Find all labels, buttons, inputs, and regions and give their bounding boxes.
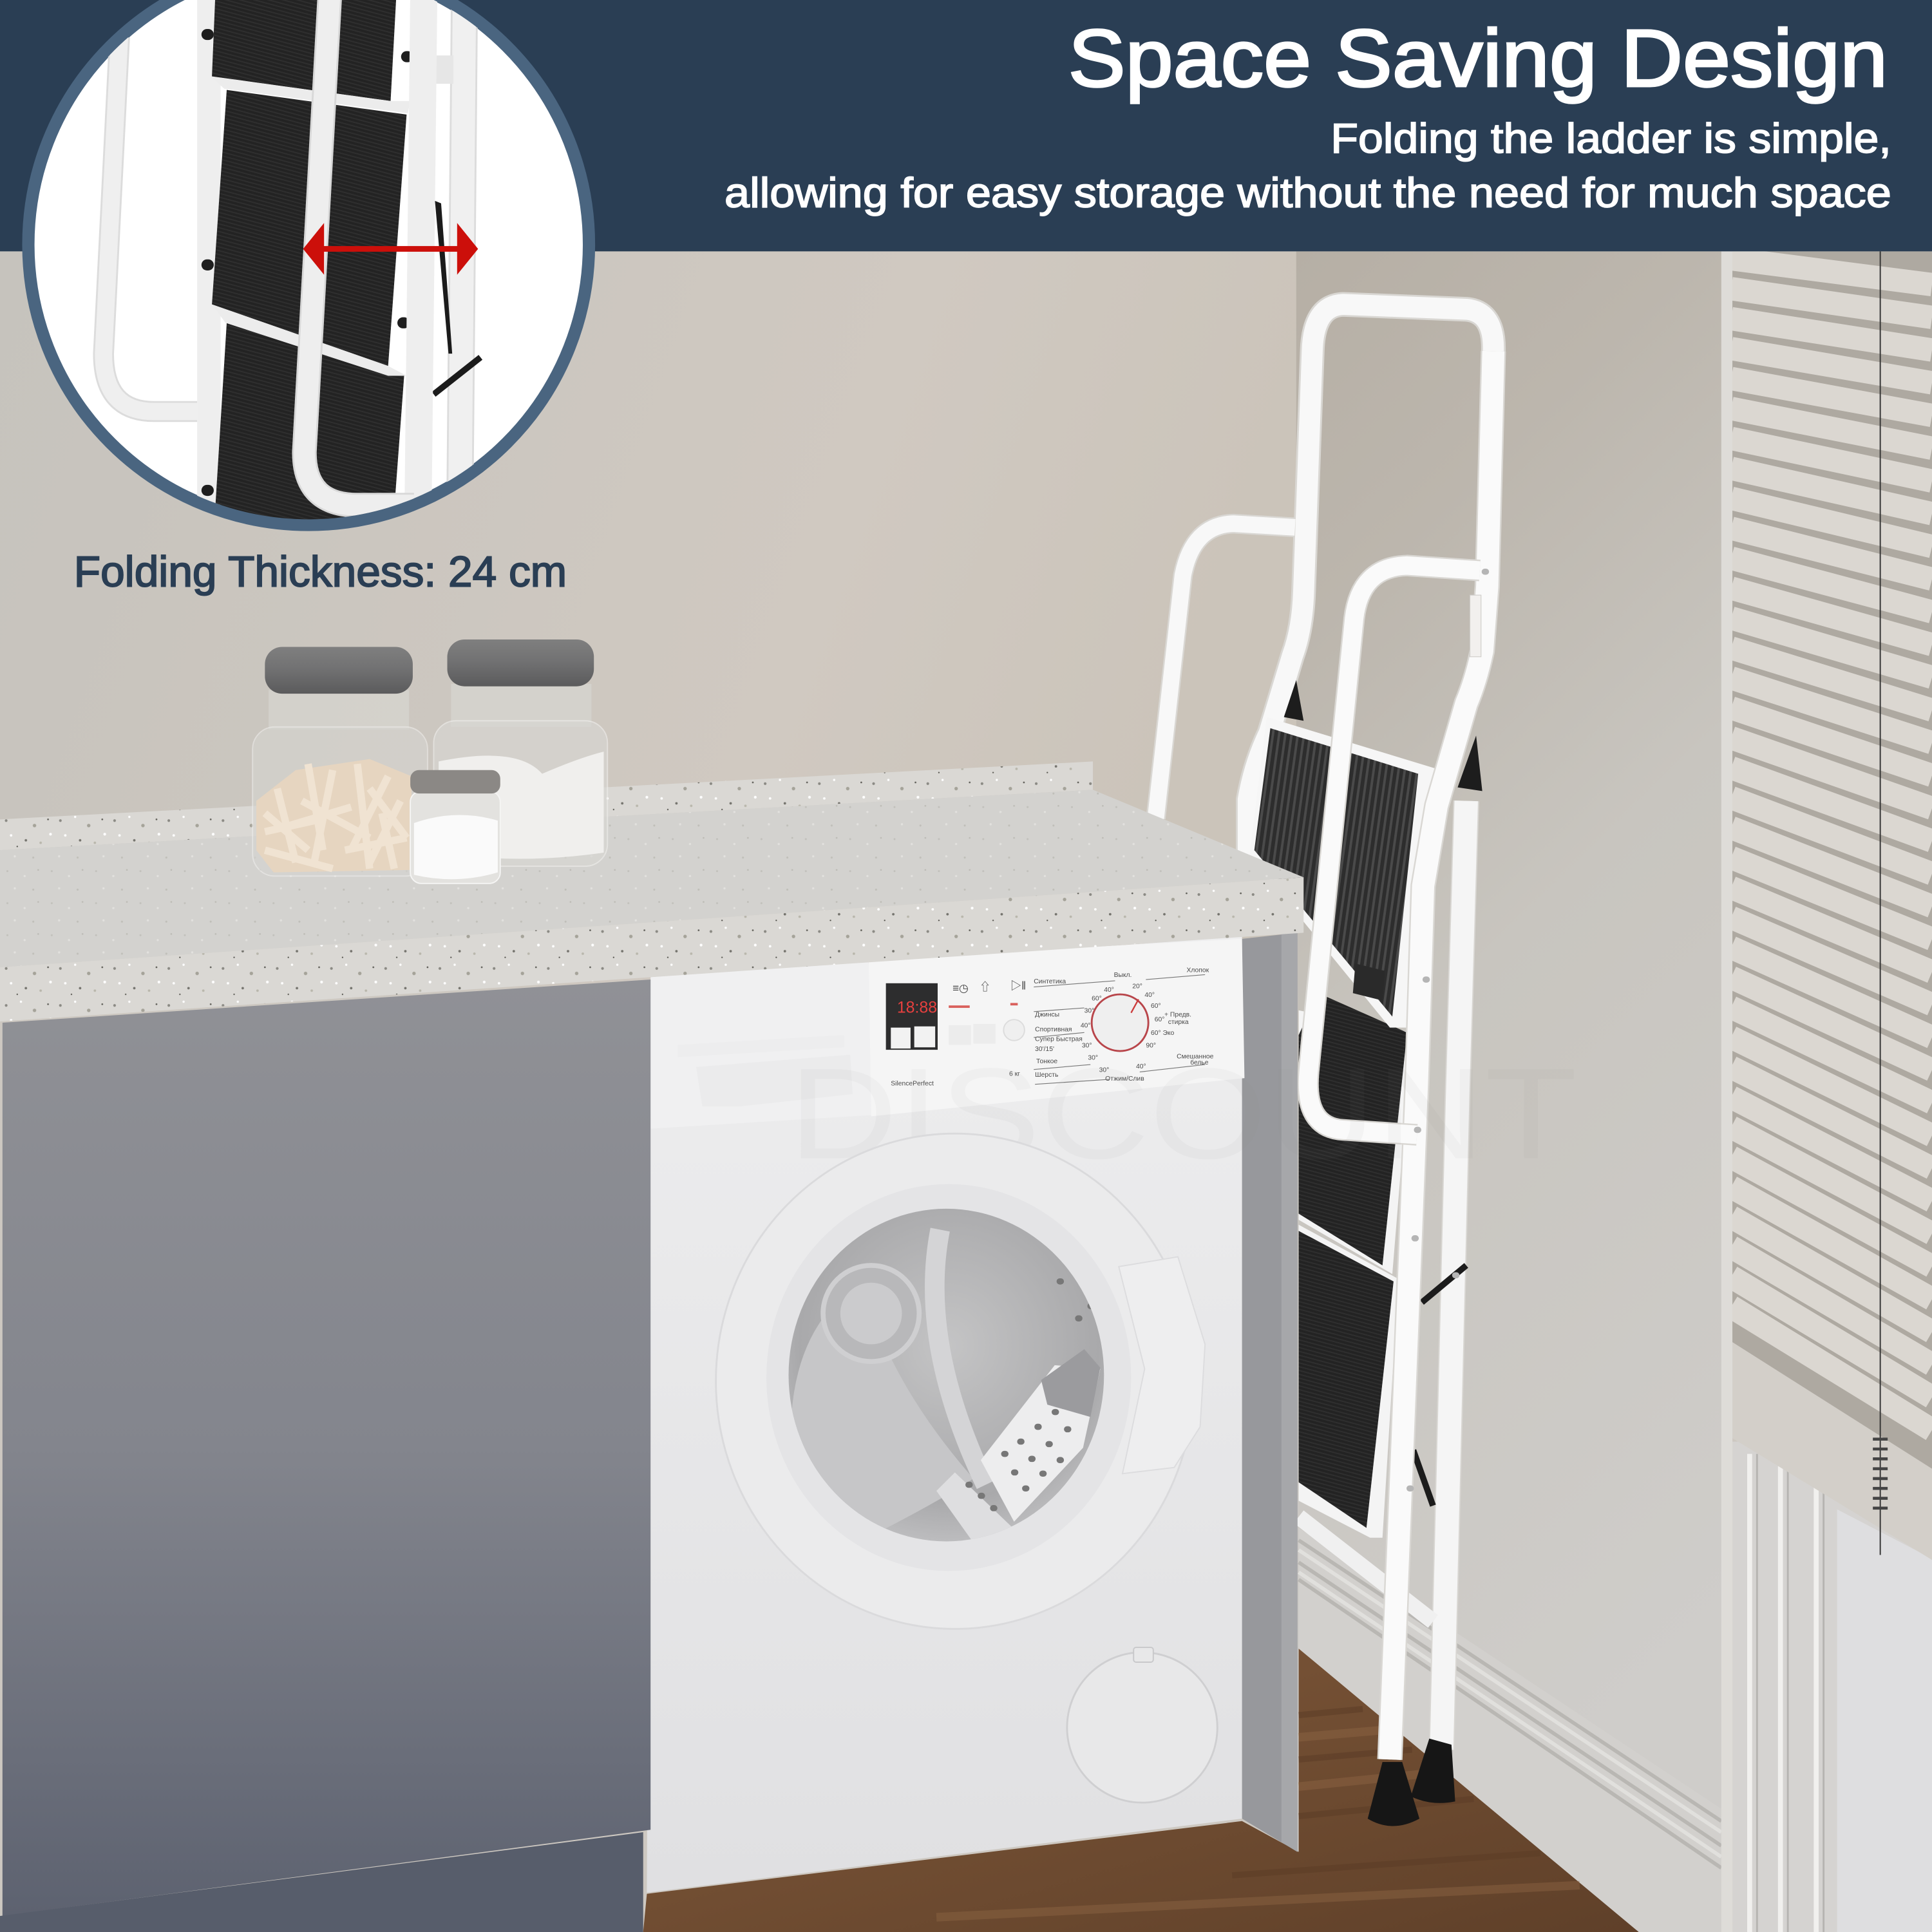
program labels: 30°: [1082, 1042, 1092, 1049]
jar of pegs: [252, 647, 428, 876]
warning sticker: [1470, 595, 1481, 657]
second step: [1299, 1010, 1412, 1274]
folding thickness caption: Folding Thickness: 24 cm: [74, 548, 567, 596]
door window: [788, 1208, 1104, 1542]
program dial: [1092, 994, 1148, 1051]
second tread: [1299, 993, 1407, 1265]
title: Space Saving Design: [1068, 13, 1888, 104]
program labels: Спортивная: [1035, 1026, 1072, 1033]
program labels: 30°: [1084, 1008, 1094, 1015]
subtitle: allowing for easy storage without the need for much space: [724, 169, 1891, 216]
subtitle: [724, 115, 1891, 216]
countertop: [0, 761, 1303, 1021]
inset left rail: [197, 0, 220, 542]
program labels: 60°: [1092, 996, 1102, 1003]
bolts: [1410, 572, 1486, 1488]
counter surface: [0, 790, 1303, 967]
door handle: [1119, 1257, 1205, 1473]
control panel: [869, 939, 1244, 1116]
grey cabinet: [0, 980, 650, 1932]
program labels: Смешанное: [1177, 1053, 1214, 1060]
program labels: Хлопок: [1186, 967, 1209, 974]
window panel below blinds: [1721, 1442, 1932, 1932]
program labels: белье: [1190, 1059, 1209, 1066]
inset left handle: [104, 37, 197, 412]
buttons: ▷‖: [1010, 979, 1026, 992]
tread label patch: [1353, 963, 1385, 1001]
inset struts: [435, 201, 452, 354]
jar of powder: [433, 639, 607, 866]
program labels: 60°: [1151, 1003, 1161, 1010]
program labels: 6 кг: [1009, 1070, 1020, 1077]
top tread: [1255, 728, 1418, 1016]
program labels: Тонкое: [1036, 1058, 1057, 1065]
program labels: + Предв.: [1164, 1011, 1191, 1018]
program labels: 20°: [1132, 983, 1142, 990]
buttons: [949, 979, 1026, 1045]
third tread: [1299, 1231, 1394, 1528]
program labels: 90°: [1146, 1042, 1156, 1049]
washer body: [647, 936, 1242, 1893]
cabinet plinth: [0, 1832, 643, 1932]
program labels: 30°: [1099, 1067, 1109, 1074]
program labels: 30'/15': [1035, 1046, 1054, 1053]
lower tube: [1299, 1517, 1433, 1622]
program labels: стирка: [1168, 1019, 1189, 1026]
inset rear rail: [460, 0, 464, 542]
program labels: Синтетика: [1034, 978, 1066, 985]
buttons: ⇧: [980, 980, 990, 993]
subtitle: Folding the ladder is simple,: [1331, 115, 1891, 162]
inset front tube: [305, 0, 414, 505]
program labels: Супер Быстрая: [1035, 1036, 1083, 1043]
cabinet door: [3, 980, 650, 1916]
program labels: Шерсть: [1035, 1072, 1058, 1079]
black struts: [1414, 1265, 1466, 1506]
left wall: [0, 251, 1296, 990]
program labels: 60°: [1155, 1016, 1164, 1023]
front right frame and leg: [1390, 351, 1493, 1759]
faint watermark: DISCOUNT: [788, 1041, 1577, 1186]
third step: [1299, 1225, 1399, 1538]
front handle: [1308, 565, 1480, 1135]
detergent drawer: [650, 961, 871, 1129]
program labels: 40°: [1104, 987, 1114, 994]
black brackets: [1284, 680, 1482, 791]
backsplash strip: [0, 761, 1093, 850]
program labels: 40°: [1136, 1063, 1146, 1070]
washing machine: [647, 936, 1244, 1893]
counter front edge: [0, 877, 1303, 1021]
baseboard: [1299, 1528, 1721, 1932]
program labels: Джинсы: [1035, 1011, 1059, 1018]
side panel: [1242, 933, 1298, 1852]
program labels: 40°: [1081, 1023, 1091, 1030]
program labels: 40°: [1144, 992, 1155, 999]
red double arrow: [303, 223, 478, 275]
header band: [0, 0, 1932, 251]
program labels: [891, 967, 1214, 1088]
folded step ladder: [1156, 305, 1493, 1826]
washer door: [716, 1133, 1205, 1629]
service hatch: [1067, 1647, 1217, 1803]
digital display: 18:88: [897, 999, 937, 1017]
right wall: [1296, 251, 1727, 1932]
inset bolts: [207, 35, 408, 490]
inset right rail: [404, 0, 437, 542]
window blinds: [1721, 251, 1932, 1932]
rear rail and leg: [1442, 801, 1466, 1750]
back frame: [1248, 305, 1493, 862]
rubber feet: [1368, 1739, 1455, 1826]
small salt jar: [410, 770, 500, 884]
circular detail inset: [28, 0, 589, 542]
buttons: ≡◷: [952, 981, 969, 994]
digital display: [886, 983, 938, 1050]
program labels: SilencePerfect: [891, 1081, 934, 1088]
program labels: 30°: [1088, 1054, 1098, 1061]
inset treads: [212, 90, 406, 366]
program labels: Выкл.: [1114, 972, 1132, 979]
program labels: Отжим/Слив: [1105, 1075, 1144, 1083]
program labels: 60° Эко: [1151, 1030, 1175, 1037]
inset step edges: [211, 77, 410, 113]
left arm handle: [1156, 524, 1295, 818]
top step: [1249, 717, 1437, 1028]
wood floor: [643, 1649, 1639, 1932]
